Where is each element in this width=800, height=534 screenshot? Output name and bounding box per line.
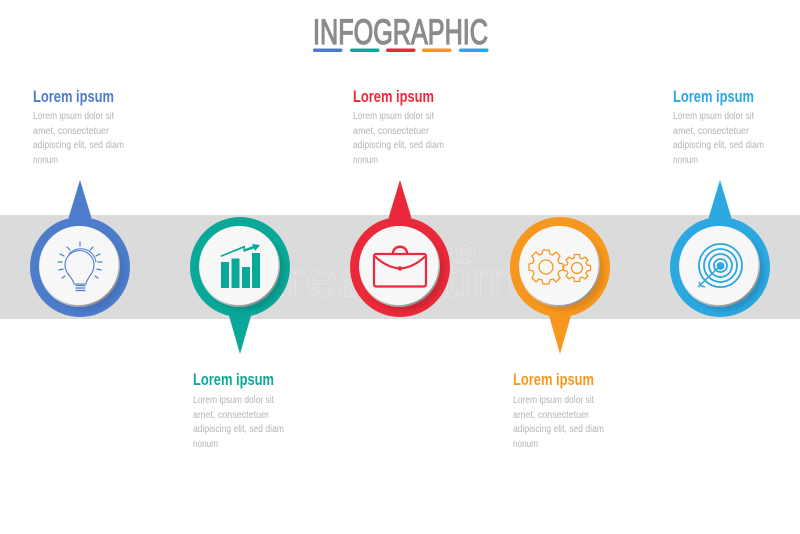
pin 1: blue	[30, 180, 130, 317]
grey band	[0, 215, 800, 319]
icon: gears	[529, 250, 590, 284]
text block 3	[353, 87, 444, 166]
text block 2: amet, consectetuer	[193, 409, 269, 421]
icon: bar chart	[220, 244, 260, 288]
text block 3: amet, consectetuer	[353, 125, 429, 137]
text block 1: adipiscing elit, sed diam	[33, 139, 124, 151]
pin 3: red	[350, 180, 450, 317]
text block 5: nonum	[673, 154, 698, 166]
text block 4	[513, 370, 604, 450]
text block 1: Lorem ipsum dolor sit	[33, 110, 114, 122]
icon: target	[698, 244, 742, 287]
text block 3: Lorem ipsum	[353, 87, 434, 106]
text block 1	[33, 87, 124, 166]
text block 4: Lorem ipsum dolor sit	[513, 394, 594, 406]
text block 4: nonum	[513, 438, 538, 450]
text block 4: Lorem ipsum	[513, 370, 594, 389]
pin 4: orange	[510, 217, 610, 354]
text block 1: Lorem ipsum	[33, 87, 114, 106]
text block 2: adipiscing elit, sed diam	[193, 423, 284, 435]
title: INFOGRAPHIC	[313, 13, 488, 52]
text block 5: amet, consectetuer	[673, 125, 749, 137]
text block 2: Lorem ipsum dolor sit	[193, 394, 274, 406]
text block 2: nonum	[193, 438, 218, 450]
icon: light bulb	[58, 242, 102, 290]
text block 1: nonum	[33, 154, 58, 166]
text block 2: Lorem ipsum	[193, 370, 274, 389]
pin 5: sky blue	[670, 180, 770, 317]
icon: briefcase	[374, 247, 426, 286]
text block 3: nonum	[353, 154, 378, 166]
text block 4: adipiscing elit, sed diam	[513, 423, 604, 435]
text block 1: amet, consectetuer	[33, 125, 109, 137]
text block 3: adipiscing elit, sed diam	[353, 139, 444, 151]
pin 2: teal	[190, 217, 290, 354]
text block 5: adipiscing elit, sed diam	[673, 139, 764, 151]
text block 2	[193, 370, 284, 450]
text block 5: Lorem ipsum dolor sit	[673, 110, 754, 122]
text block 5: Lorem ipsum	[673, 87, 754, 106]
text block 5	[673, 87, 764, 166]
text block 4: amet, consectetuer	[513, 409, 589, 421]
text block 3: Lorem ipsum dolor sit	[353, 110, 434, 122]
watermark: dreamstime	[255, 251, 550, 307]
